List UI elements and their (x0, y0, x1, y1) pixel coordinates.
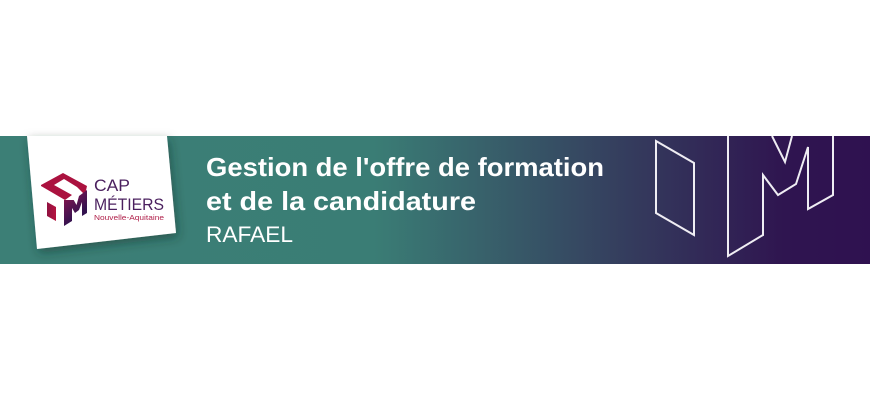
subtitle: RAFAEL (206, 222, 293, 247)
logo card (27, 136, 176, 249)
banner infographic (0, 132, 870, 264)
title (206, 152, 604, 216)
banner background (0, 136, 870, 264)
title: Gestion de l'offre de formation (206, 152, 604, 182)
logo wordmark: Nouvelle-Aquitaine (94, 213, 164, 222)
logo wordmark: CAP (94, 176, 130, 195)
decorative outline logo shapes (656, 136, 833, 256)
icon: cube logo (41, 173, 87, 226)
logo wordmark (94, 176, 164, 222)
white card (27, 136, 176, 249)
title: et de la candidature (206, 186, 476, 216)
logo wordmark: MÉTIERS (94, 195, 164, 214)
